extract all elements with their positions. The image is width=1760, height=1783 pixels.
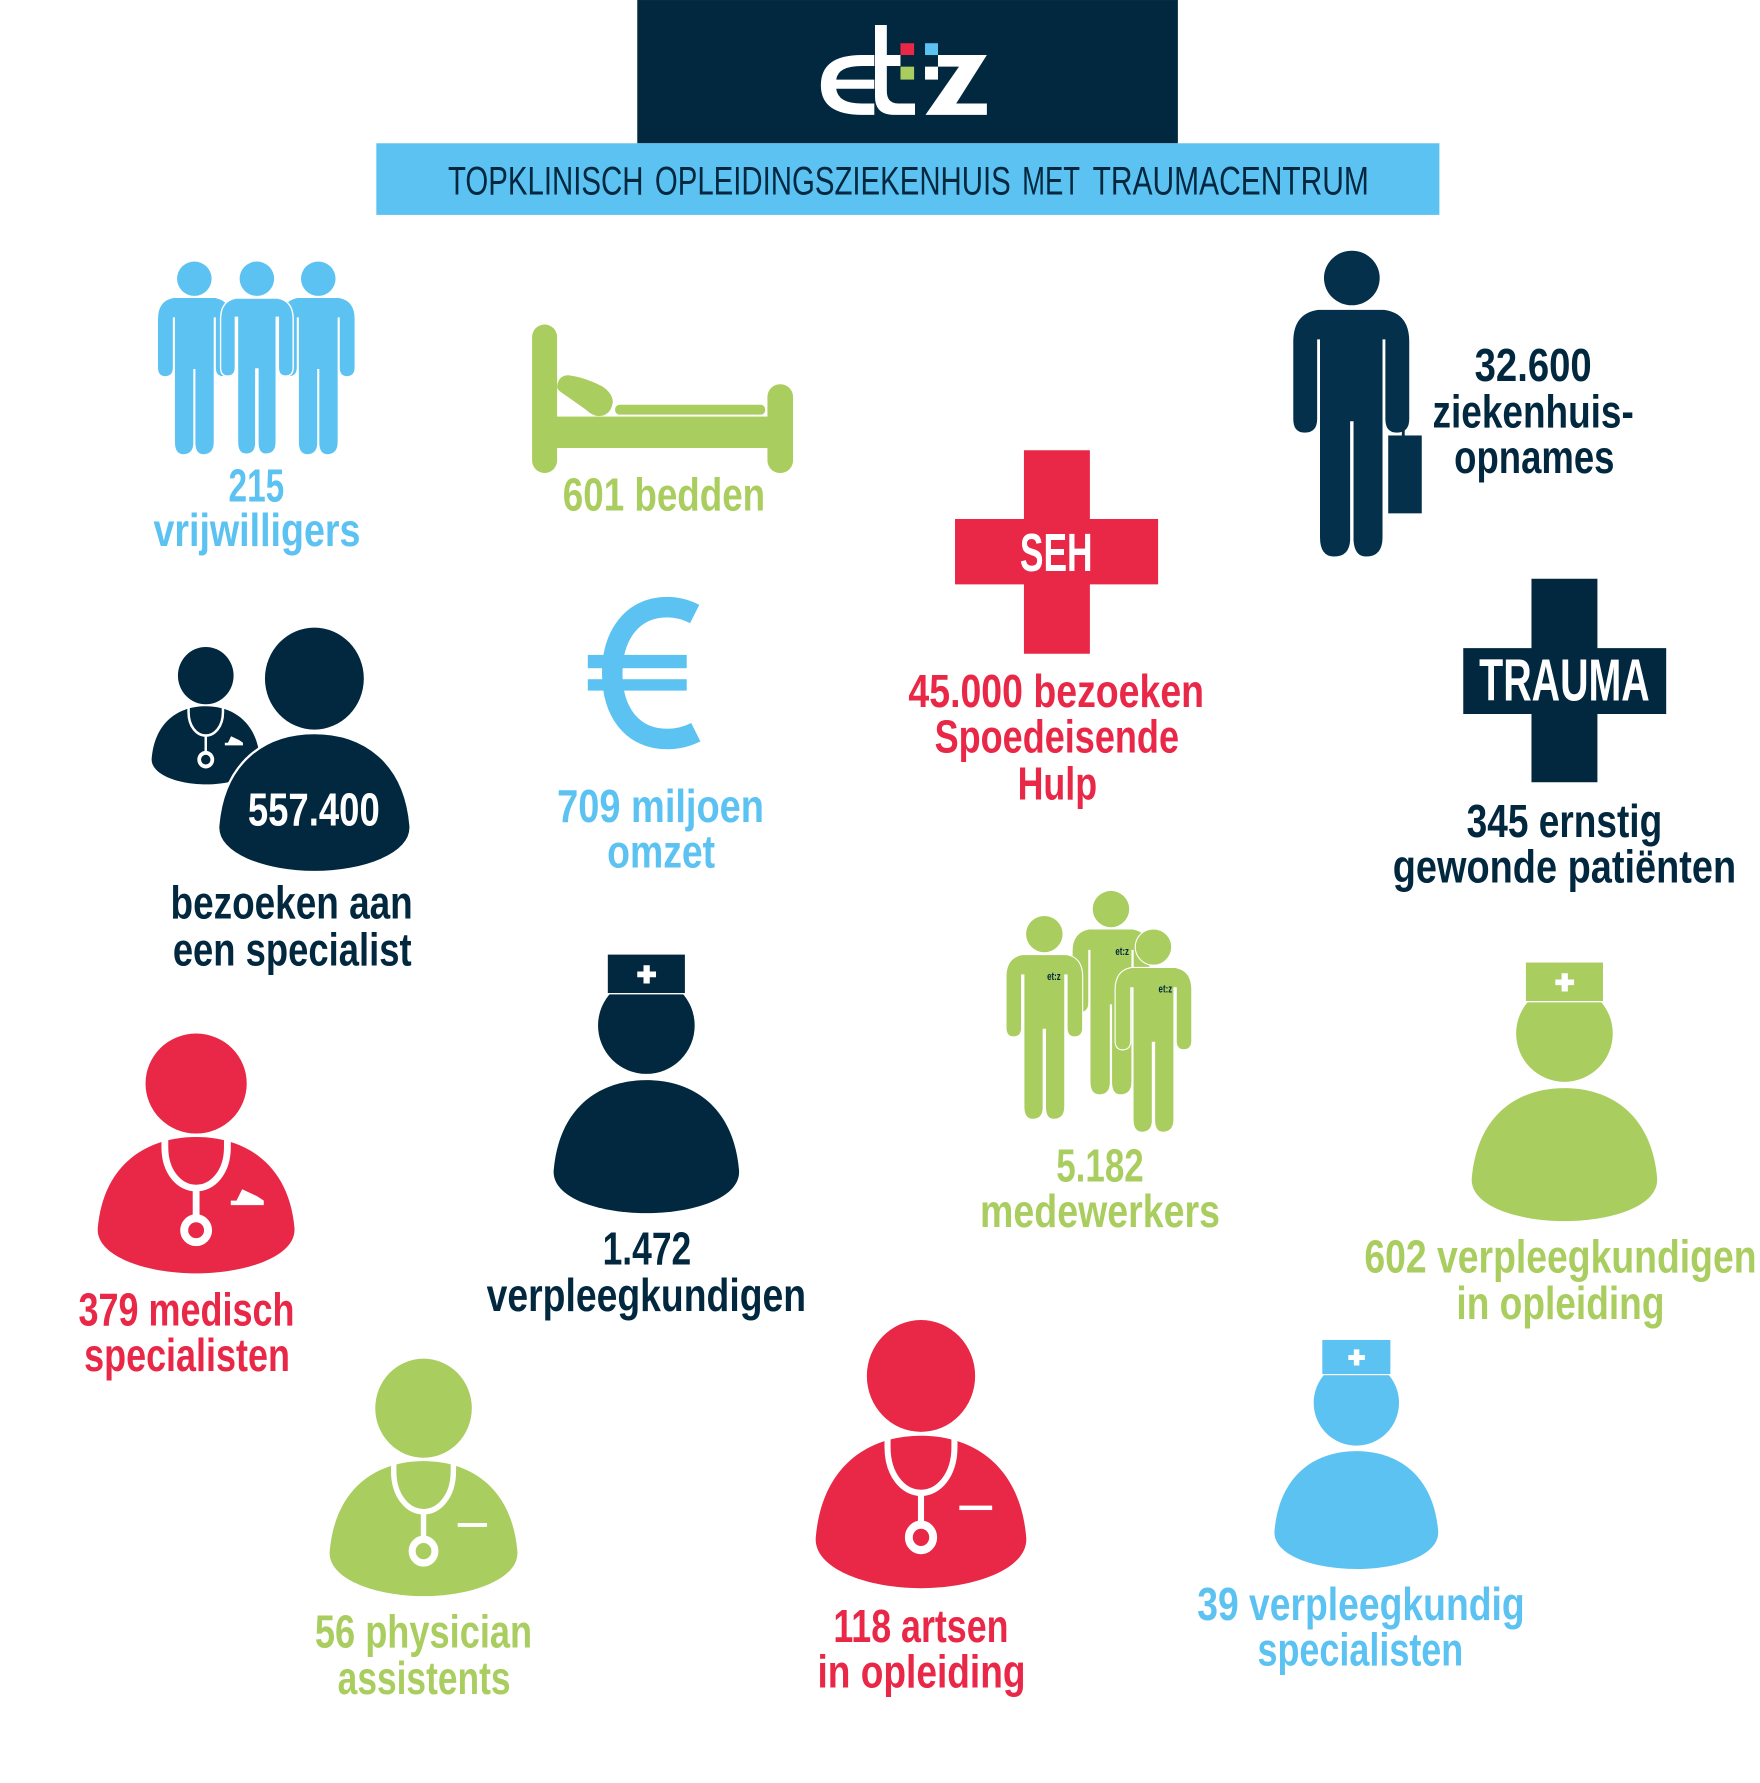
label: 602 verpleegkundigen in opleiding: in opleiding (1456, 1277, 1664, 1329)
label: bezoeken aan een specialist: een specialist (173, 923, 412, 975)
icon: TRAUMA navy cross (1463, 579, 1666, 782)
label: 215 vrijwilligers: 215 (229, 459, 284, 511)
label: 118 artsen in opleiding: 118 artsen (833, 1600, 1008, 1652)
icon: SEH red cross (955, 450, 1158, 654)
label: 118 artsen in opleiding: in opleiding (817, 1645, 1026, 1697)
header: subtitle banner (376, 143, 1439, 215)
label: 39 verpleegkundig specialisten (1197, 1578, 1525, 1676)
icon: blue nurse specialist (1274, 1339, 1438, 1569)
header: subtitle banner: OPLEIDINGSZIEKENHUIS (655, 159, 1011, 203)
label: 601 bedden: 601 bedden (563, 469, 765, 521)
label: 5.182 medewerkers: medewerkers (980, 1185, 1220, 1237)
label: 379 medisch specialisten: specialisten (84, 1329, 290, 1381)
label: 709 miljoen omzet: 709 miljoen (557, 780, 764, 832)
label: 1.472 verpleegkundigen: 1.472 (603, 1222, 691, 1274)
icon: three volunteers (158, 262, 355, 454)
icon: red medical specialist (98, 1034, 295, 1273)
icon: small specialist (152, 647, 260, 784)
label: bezoeken aan een specialist: bezoeken aan (171, 877, 413, 929)
label: 345 ernstig gewonde patiënten: 345 ernstig (1467, 795, 1662, 847)
label: 602 verpleegkundigen in opleiding (1364, 1230, 1757, 1329)
label: 379 medisch specialisten (78, 1284, 294, 1381)
header: subtitle banner: TOPKLINISCH (448, 159, 644, 203)
label: 32.600 ziekenhuisopnames: ziekenhuis- (1433, 386, 1634, 438)
label: 118 artsen in opleiding (817, 1600, 1026, 1697)
icon: three staff members (1006, 891, 1192, 1132)
label: 5.182 medewerkers: 5.182 (1056, 1139, 1144, 1191)
label: 215 vrijwilligers (153, 459, 360, 556)
icon: large patient (218, 628, 411, 872)
icon: SEH red cross: SEH (1020, 524, 1093, 583)
icon: TRAUMA navy cross: TRAUMA (1479, 646, 1650, 713)
icon: specialist with patient 557.400 (152, 628, 411, 872)
label: 56 physician assistents: 56 physician (315, 1605, 532, 1657)
label: 45.000 bezoeken Spoedeisende Hulp: Spoedeisende (935, 711, 1179, 763)
label: 345 ernstig gewonde patiënten (1393, 795, 1736, 892)
label: 32.600 ziekenhuisopnames: 32.600 (1475, 339, 1592, 391)
icon: euro sign (588, 607, 696, 739)
header: logo block (637, 0, 1178, 143)
header: subtitle banner: MET (1022, 159, 1080, 203)
label: 379 medisch specialisten: 379 medisch (78, 1284, 294, 1336)
icon: three staff members: et:z (1115, 946, 1129, 958)
header: subtitle banner: TRAUMACENTRUM (1093, 159, 1369, 203)
label: 709 miljoen omzet: omzet (607, 826, 715, 878)
label: 5.182 medewerkers (980, 1139, 1220, 1237)
icon: green nurse (1472, 962, 1657, 1221)
label: 709 miljoen omzet (557, 780, 764, 878)
icon: three staff members: et:z (1159, 984, 1172, 996)
label: 39 verpleegkundig specialisten: specialisten (1257, 1624, 1463, 1676)
label: 56 physician assistents: assistents (338, 1652, 510, 1704)
label: 32.600 ziekenhuisopnames (1433, 339, 1634, 483)
icon: three staff members: et:z (1047, 971, 1061, 983)
label: 1.472 verpleegkundigen (487, 1222, 806, 1321)
icon: hospital bed (532, 325, 793, 473)
icon: green physician assistant (330, 1359, 517, 1596)
icon: red doctor in training (816, 1320, 1026, 1588)
icon: navy nurse (554, 954, 739, 1213)
label: 45.000 bezoeken Spoedeisende Hulp: Hulp (1018, 757, 1097, 809)
icon: etz logo (821, 25, 987, 115)
icon: specialist with patient 557.400: 557.400 (248, 783, 380, 835)
label: 45.000 bezoeken Spoedeisende Hulp (908, 665, 1204, 809)
label: 1.472 verpleegkundigen: verpleegkundigen (487, 1269, 806, 1321)
label: 45.000 bezoeken Spoedeisende Hulp: 45.000 bezoeken (908, 665, 1204, 717)
label: 56 physician assistents (315, 1605, 532, 1704)
label: 32.600 ziekenhuisopnames: opnames (1454, 431, 1614, 483)
icon: businessman with briefcase (1293, 251, 1422, 557)
label: 215 vrijwilligers: vrijwilligers (153, 504, 360, 556)
label: 39 verpleegkundig specialisten: 39 verpleegkundig (1197, 1578, 1525, 1630)
label: bezoeken aan een specialist (171, 877, 413, 975)
